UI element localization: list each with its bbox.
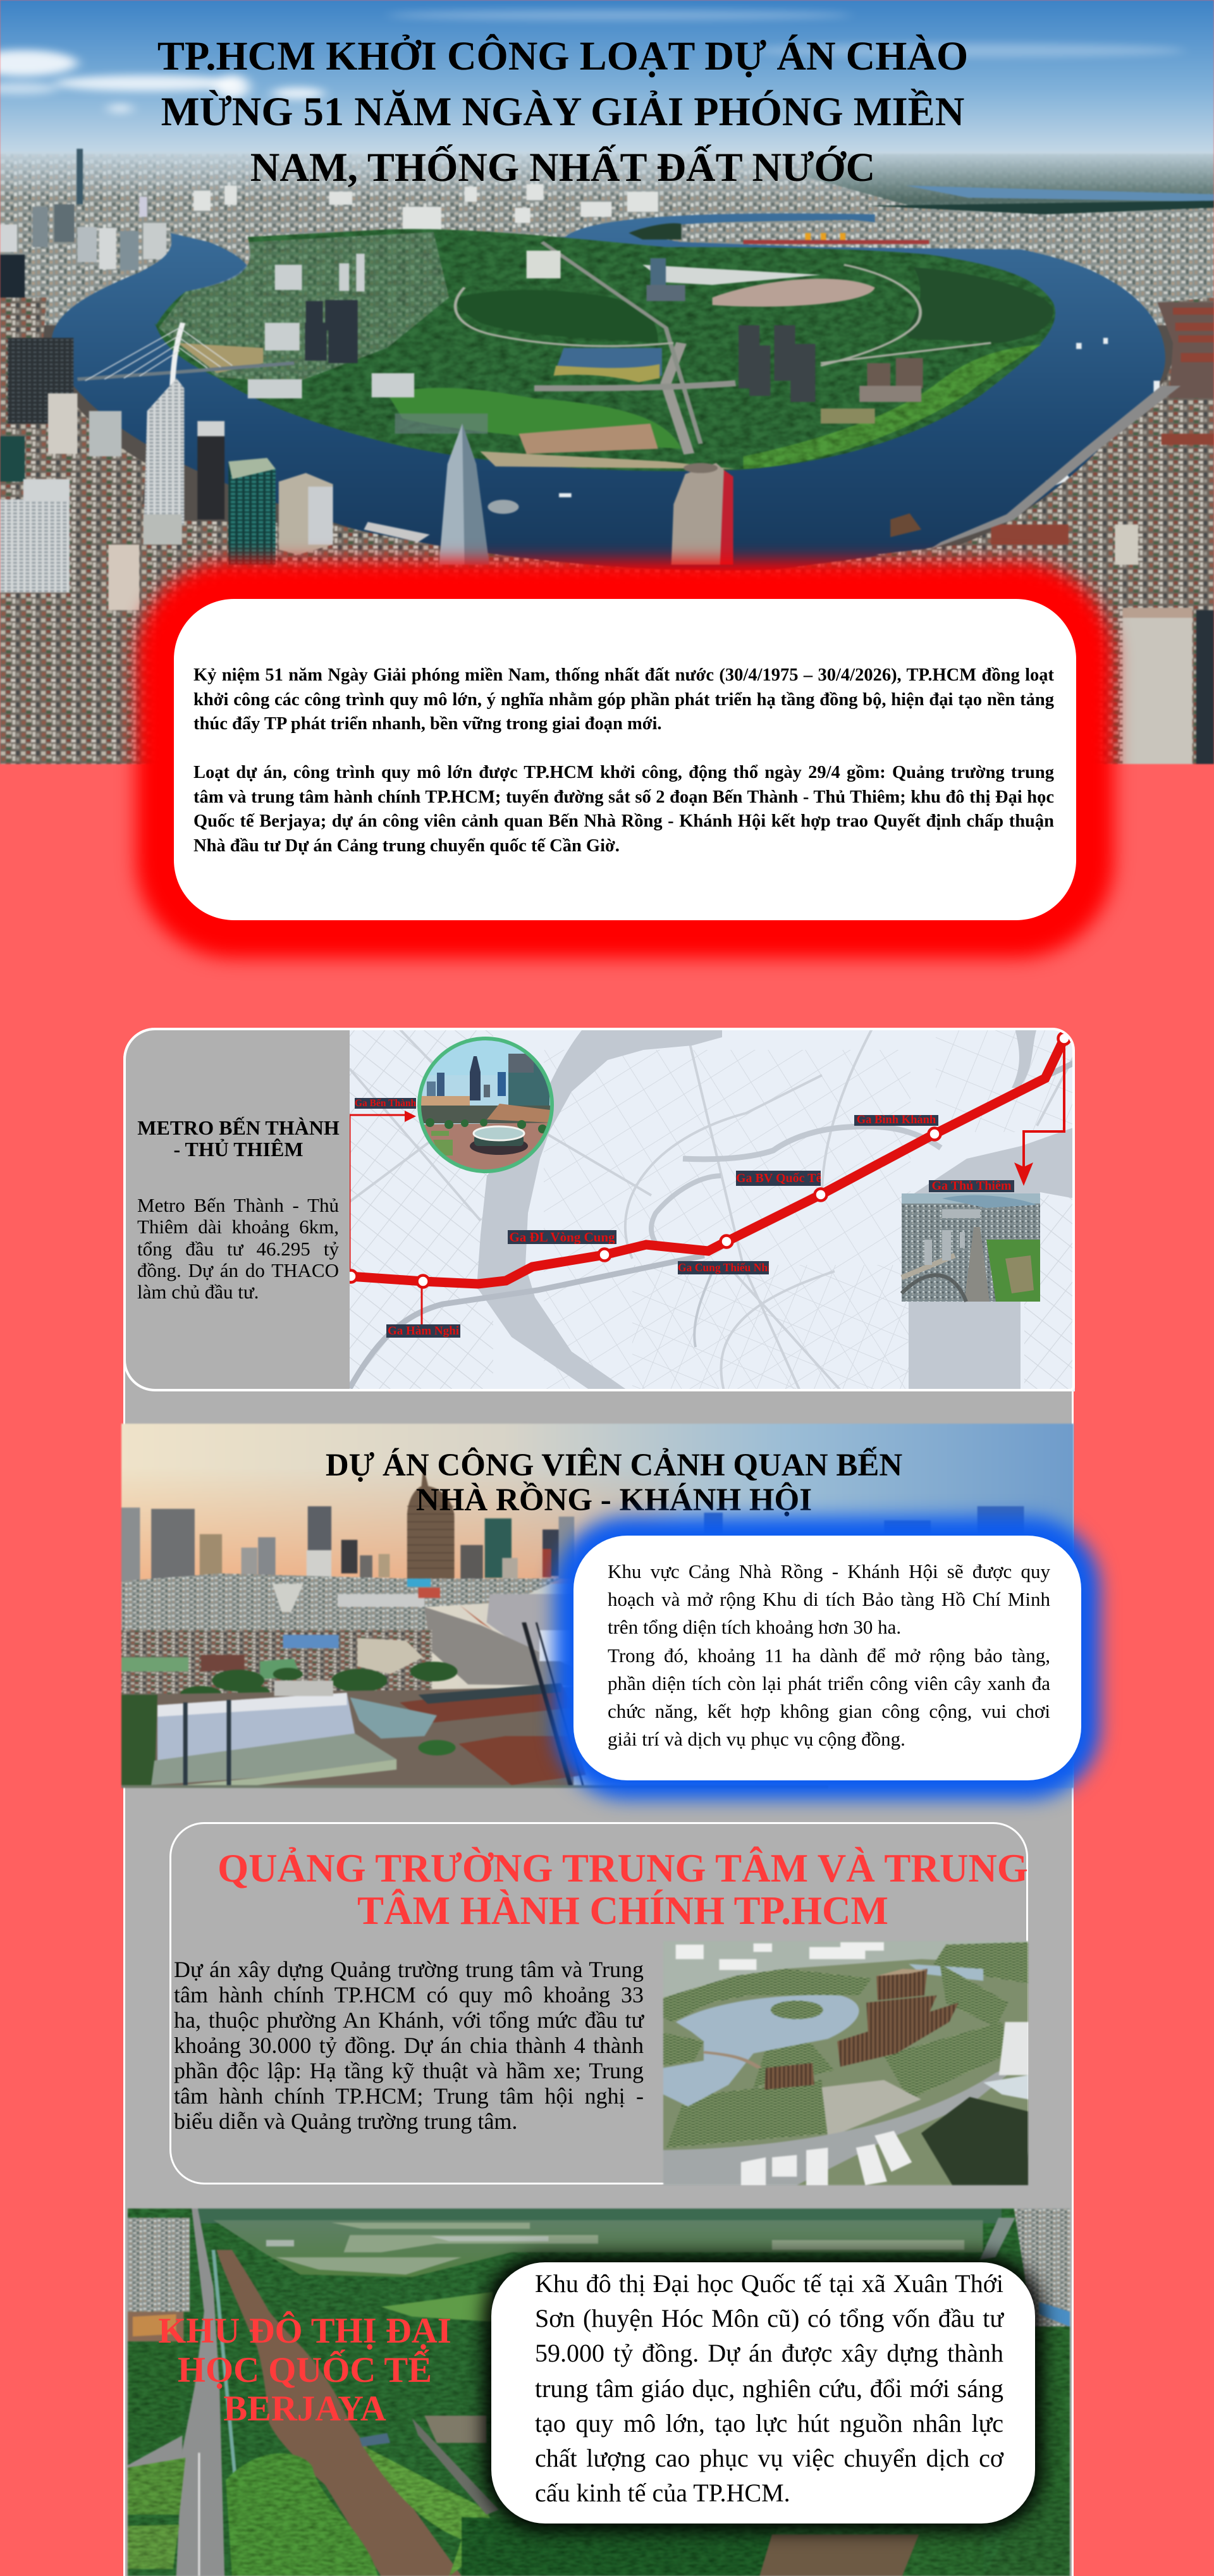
panel: Nha Rong text box with blue glow: Khu vực Cảng Nhà Rồng - Khánh Hội sẽ được quy: [608, 1560, 1050, 1582]
heading: Nha Rong park project: DỰ ÁN CÔNG VIÊN CẢNH QUAN BẾN: [326, 1448, 902, 1483]
right bank city far: [1022, 222, 1214, 302]
text: central square description: khoảng 30.000 tỷ đồng. Dự án chia thành 4 thành: [174, 2033, 644, 2058]
label: Ga Bến Thành: Ga Bến Thành: [355, 1098, 416, 1109]
panel: Berjaya text box with black glow: chất lượng cao phục vụ việc chuyển dịch cơ: [535, 2444, 1003, 2472]
label: Ga BV Quốc Tế: Ga BV Quốc Tế: [736, 1171, 821, 1185]
main road: [128, 2209, 235, 2576]
city blocks at top: [663, 1941, 1028, 1998]
panel: metro route map: [350, 1030, 1075, 1391]
title: [157, 34, 968, 190]
heading: central square: TÂM HÀNH CHÍNH TP.HCM: [357, 1889, 888, 1933]
panel: Nha Rong text box with blue glow: chức năng, kết hợp không gian công cộng, vui chơi: [608, 1700, 1050, 1722]
panel: Nha Rong text box with blue glow: [573, 1536, 1081, 1780]
heading: Berjaya urban area: BERJAYA: [223, 2389, 386, 2429]
panel: Berjaya text box with black glow: trung tâm giáo dục, nghiên cứu, đổi mới sáng: [535, 2374, 1003, 2403]
sky with clouds: [0, 0, 1214, 161]
title: NAM, THỐNG NHẤT ĐẤT NƯỚC: [250, 145, 875, 190]
card outline: central square section: [169, 1822, 1028, 2185]
panel: intro box with red glow: Quốc tế Berjaya; dự án công viên cảnh quan Bến Nhà Rồng - Khánh Hội kết hợp trao Quyết định chấp thuận: [193, 811, 1054, 831]
text: central square description: ha, thuộc phường An Khánh, với tổng mức đầu tư: [174, 2007, 644, 2033]
panel: Berjaya text box with black glow: tạo quy mô lớn, tạo lực hút nguồn nhân lực: [535, 2409, 1003, 2437]
brown canal: [216, 2250, 462, 2576]
title: TP.HCM KHỞI CÔNG LOẠT DỰ ÁN CHÀO: [157, 34, 968, 78]
heading: Berjaya urban area: KHU ĐÔ THỊ ĐẠI: [158, 2311, 451, 2351]
photo: central square rendering: [663, 1940, 1029, 2186]
heading: Nha Rong park project: [326, 1447, 902, 1518]
photo: Thu Thiem aerial: [902, 1193, 1040, 1302]
text: metro description: Thiêm dài khoảng 6km,: [137, 1216, 339, 1238]
connector to Thu Thiem with arrow: [1014, 1038, 1064, 1186]
connector to Ham Nghi: [421, 1285, 422, 1325]
cable-stayed bridge: [77, 323, 294, 393]
hero photo: aerial view of Thu Thiem peninsula and Saigon river: [0, 0, 1214, 765]
heading: central square: [218, 1846, 1028, 1933]
panel: intro box with red glow: [174, 599, 1076, 920]
panel: Nha Rong text box with blue glow: giải trí và dịch vụ phục vụ cộng đồng.: [608, 1728, 905, 1750]
heading: metro: - THỦ THIÊM: [173, 1138, 304, 1161]
panel: Berjaya text box with black glow: cấu kinh tế của TP.HCM.: [535, 2479, 790, 2507]
gardens: [663, 1964, 1009, 2148]
text: metro description: Metro Bến Thành - Thủ: [137, 1194, 339, 1216]
label: Ga Hàm Nghi: Ga Hàm Nghi: [388, 1324, 459, 1338]
text: central square description: tâm hành chính TP.HCM; Trung tâm hội nghị -: [174, 2083, 644, 2109]
panel: Berjaya text box with black glow: Sơn (huyện Hóc Môn cũ) có tổng vốn đầu tư: [535, 2304, 1003, 2333]
heading: metro: METRO BẾN THÀNH: [137, 1116, 340, 1139]
right bank city: [875, 297, 1214, 764]
metro line: [350, 1038, 1064, 1284]
stepped administrative tower: [764, 1969, 959, 2090]
foreground skyscrapers: [144, 378, 921, 565]
left village: [128, 2217, 190, 2460]
panel: Berjaya text box with black glow: 59.000 tỷ đồng. Dự án được xây dựng thành: [535, 2339, 1003, 2367]
roads and plaza: [663, 2022, 1028, 2185]
green peninsula: [155, 229, 1055, 471]
lower river right: [759, 2534, 927, 2576]
river and port road: [424, 1594, 577, 1685]
left and bottom city: [0, 297, 1115, 764]
access road and moored boat: [359, 2415, 499, 2515]
photo: Berjaya urban area aerial: [126, 2207, 1071, 2576]
panel: Nha Rong text box with blue glow: phần diện tích còn lại phát triển công viên cây xanh đa: [608, 1672, 1050, 1694]
dark tree block: [921, 2097, 1028, 2185]
panel: page column background: [123, 1028, 1074, 2576]
heading: Berjaya urban area: [158, 2311, 451, 2429]
riverside foliage: [226, 2445, 778, 2576]
text: central square description: tâm hành chính TP.HCM có quy mô khoảng 33: [174, 1982, 644, 2007]
photo: Nha Rong - Khanh Hoi skyline: [120, 1423, 1075, 1789]
text: metro description: [137, 1194, 339, 1303]
panel: intro box with red glow: Nhà đầu tư Dự án Cảng trung chuyển quốc tế Cần Giờ.: [193, 836, 620, 855]
mid-ground city: [121, 1574, 561, 1636]
sky: [121, 1424, 1074, 1788]
connector to Ben Thanh: [350, 1111, 416, 1276]
panel: intro box with red glow: Loạt dự án, công trình quy mô lớn được TP.HCM khởi công, động thổ ngày 29/4 gồm: Quảng trường trung: [193, 763, 1054, 782]
right village: [980, 2209, 1070, 2576]
heading: Berjaya urban area: HỌC QUỐC TẾ: [178, 2350, 432, 2389]
text: central square description: Dự án xây dựng Quảng trường trung tâm và Trung: [174, 1957, 644, 1982]
stations: [345, 1032, 1070, 1288]
highway bridge: [350, 1063, 1075, 1388]
panel: Nha Rong text box with blue glow: hoạch và mở rộng Khu di tích Bảo tàng Hồ Chí Minh: [608, 1588, 1050, 1610]
panel: Berjaya text box with black glow: Khu đô thị Đại học Quốc tế tại xã Xuân Thới: [535, 2269, 1003, 2298]
title: MỪNG 51 NĂM NGÀY GIẢI PHÓNG MIỀN: [161, 89, 964, 134]
cluster of towers upper left: [0, 197, 166, 300]
text: metro description: tổng đầu tư 46.295 tỷ: [137, 1238, 339, 1260]
rivers: [477, 1028, 1075, 1391]
white blocks at bottom: [741, 2131, 912, 2185]
panel: Nha Rong text box with blue glow: Trong đó, khoảng 11 ha dành để mở rộng bảo tàng,: [608, 1644, 1050, 1667]
boats: [559, 338, 1160, 497]
text: metro description: làm chủ đầu tư.: [137, 1281, 259, 1303]
panel: intro box with red glow: thúc đẩy TP phát triển nhanh, bền vững trong giai đoạn mới.: [193, 714, 662, 734]
port island: [628, 220, 1038, 250]
heading: metro: [137, 1116, 340, 1161]
panel: Nha Rong text box with blue glow: trên tổng diện tích khoảng hơn 30 ha.: [608, 1616, 901, 1638]
panel: Berjaya text box with black glow: [491, 2262, 1035, 2524]
skyline towers: [121, 1466, 1024, 1589]
card outline: metro section: [123, 1028, 1075, 1391]
panel: intro box with red glow: khởi công các công trình quy mô lớn, ý nghĩa nhằm góp phần phát triển hạ tầng đồng bộ, hiện đại tạo nền tảng: [193, 689, 1054, 710]
lower right ground behind the box: [828, 1775, 1074, 1788]
warehouses and foliage: [114, 1622, 1074, 1788]
text: metro description: đồng. Dự án do THACO: [137, 1259, 339, 1281]
text: central square description: phần độc lập: Hạ tầng kỹ thuật và hầm xe; Trung: [174, 2058, 644, 2083]
panel: intro box with red glow: Kỷ niệm 51 năm Ngày Giải phóng miền Nam, thống nhất đất nước (30/4/1975 – 30/4/2026), TP.HCM đồng loạt: [193, 665, 1054, 685]
distant fields: [195, 2209, 1002, 2322]
distant city and land: [0, 149, 1214, 325]
panel: intro box with red glow: tâm và trung tâm hành chính TP.HCM; tuyến đường sắt số 2 đoạn Bến Thành - Thủ Thiêm; khu đô thị Đại học: [193, 787, 1054, 807]
text: central square description: biểu diễn và Quảng trường trung tâm.: [174, 2109, 517, 2134]
street grid: [350, 1028, 1088, 1391]
lake: [663, 1995, 859, 2107]
text: central square description: [174, 1957, 644, 2134]
Saigon river: [52, 213, 1165, 572]
label: Ga Cung Thiếu Nhi: Ga Cung Thiếu Nhi: [678, 1261, 769, 1274]
heading: central square: QUẢNG TRƯỜNG TRUNG TÂM VÀ TRUNG: [218, 1846, 1028, 1890]
circular photo: Ben Thanh station: [419, 1037, 556, 1176]
heading: Nha Rong park project: NHÀ RỒNG - KHÁNH HỘI: [416, 1482, 812, 1518]
